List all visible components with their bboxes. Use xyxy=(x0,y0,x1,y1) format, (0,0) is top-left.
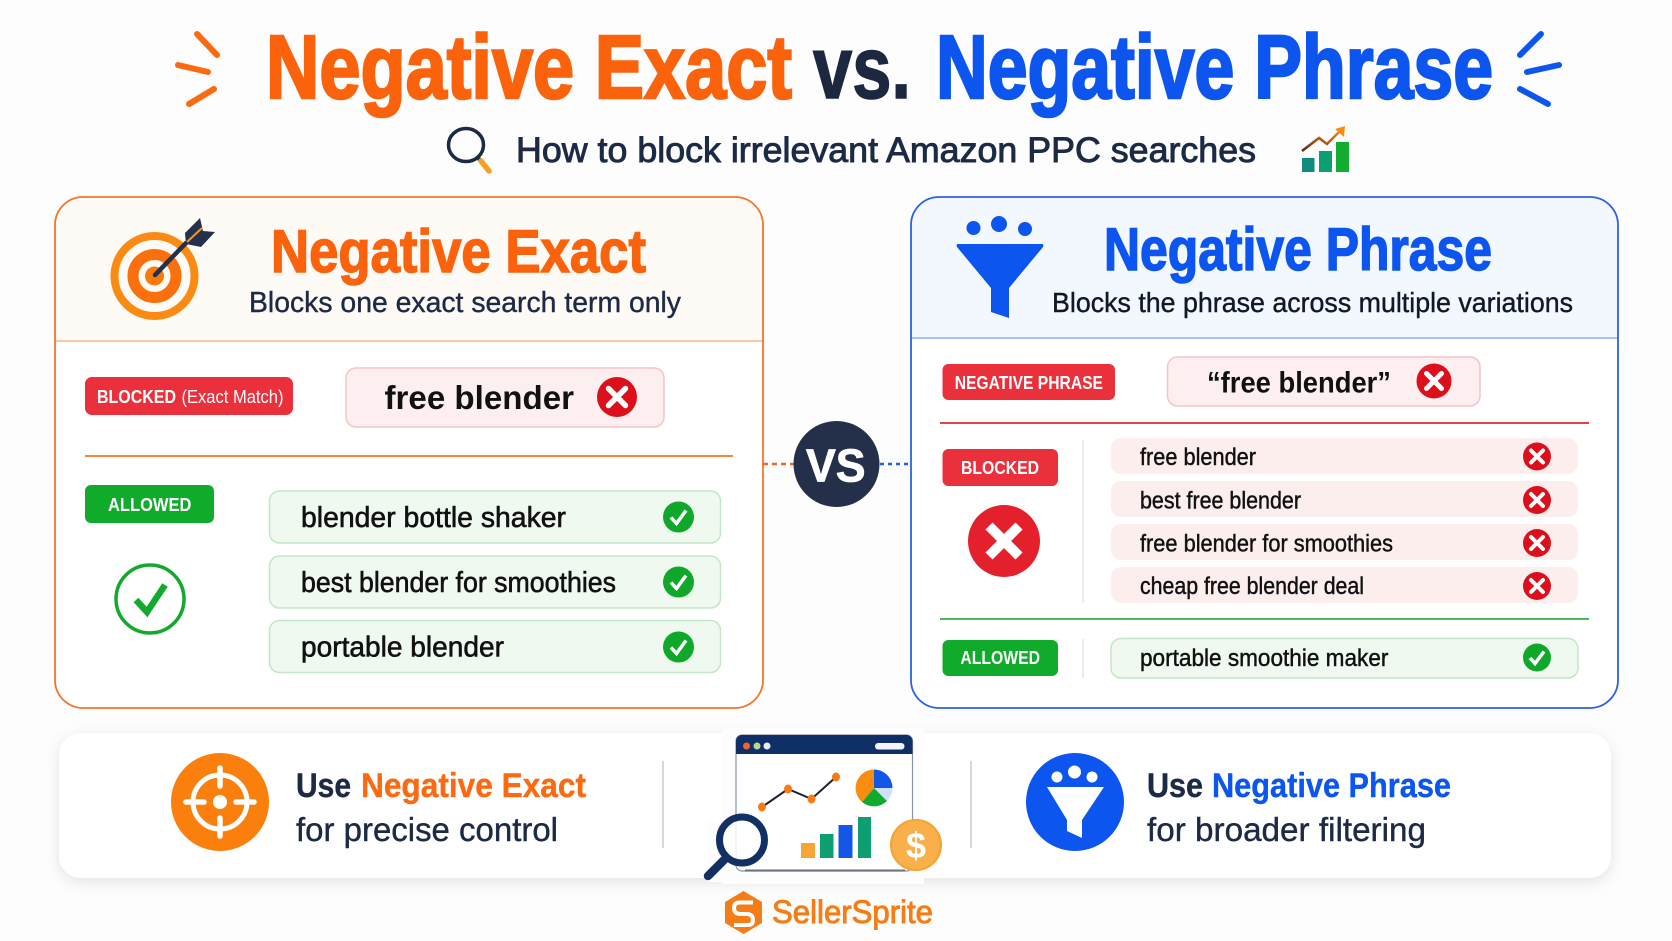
takeaway: negative exact xyxy=(296,767,586,848)
takeaway: negative phrase xyxy=(1147,767,1451,848)
badge: allowed xyxy=(85,485,214,523)
badge: allowed xyxy=(942,640,1058,676)
icon: magnifier xyxy=(448,128,489,171)
vs badge: VS xyxy=(806,440,866,492)
blocked row 2 xyxy=(1111,481,1578,517)
icon: funnel badge xyxy=(1026,753,1124,851)
title: vs.: vs. xyxy=(813,18,911,117)
badge: negative phrase: NEGATIVE PHRASE xyxy=(955,373,1103,393)
badge: blocked exact match: BLOCKED xyxy=(97,387,176,407)
bottom takeaway band xyxy=(59,728,1611,884)
blocked term xyxy=(346,368,664,427)
blocked row 3 xyxy=(1111,524,1578,560)
allowed row xyxy=(1111,638,1578,678)
icon: target with dart xyxy=(114,218,215,316)
dashboard illustration: $ xyxy=(906,825,926,866)
subtitle text: How to block irrelevant Amazon PPC searches xyxy=(516,131,1256,170)
blocked row 2: best free blender xyxy=(1140,488,1301,514)
blocked row 1: free blender xyxy=(1140,444,1256,471)
takeaway: negative exact: Use xyxy=(296,767,351,805)
blocked phrase: “free blender” xyxy=(1207,366,1391,400)
allowed row 1: blender bottle shaker xyxy=(301,502,566,534)
badge: blocked: BLOCKED xyxy=(961,458,1039,478)
badge: blocked exact match xyxy=(85,377,293,415)
icon: big red x xyxy=(968,505,1040,577)
panel subheading: Blocks one exact search term only xyxy=(249,287,681,319)
allowed row 3: portable blender xyxy=(301,632,504,664)
blocked row 4 xyxy=(1111,567,1578,603)
icon: growth chart xyxy=(1302,126,1349,172)
panel header background xyxy=(911,197,1618,338)
badge: allowed: ALLOWED xyxy=(108,495,191,515)
badge: allowed: ALLOWED xyxy=(960,648,1040,668)
vs connector xyxy=(763,421,911,507)
takeaway: negative exact: Negative Exact xyxy=(361,767,586,805)
panel heading: Negative Exact xyxy=(271,218,646,285)
panel subheading: Blocks the phrase across multiple variations xyxy=(1052,287,1573,318)
panel header background xyxy=(55,197,763,341)
dashboard illustration xyxy=(707,728,941,884)
allowed row 1 xyxy=(270,491,720,543)
vs badge xyxy=(794,421,880,507)
badge: negative phrase xyxy=(942,364,1115,400)
blocked row 4: cheap free blender deal xyxy=(1140,573,1364,600)
logo mark xyxy=(725,891,762,934)
takeaway: negative phrase: Use xyxy=(1147,767,1203,805)
blocked term: free blender xyxy=(384,379,574,416)
panel background xyxy=(911,197,1618,708)
panel: negative phrase xyxy=(911,197,1618,708)
left sparks xyxy=(178,34,217,104)
logo: SellerSprite xyxy=(725,891,933,934)
logo wordmark: SellerSprite xyxy=(772,894,933,930)
icon: big green check xyxy=(116,565,184,633)
icon: funnel xyxy=(957,216,1043,318)
allowed row 2 xyxy=(270,556,720,608)
takeaway: negative exact: for precise control xyxy=(296,811,558,848)
blocked list xyxy=(1111,438,1578,603)
panel: negative exact xyxy=(55,197,763,708)
right sparks xyxy=(1520,34,1559,104)
panel background xyxy=(55,197,763,708)
badge: blocked exact match: (Exact Match) xyxy=(182,387,284,407)
title: negative phrase: Negative Phrase xyxy=(936,18,1493,118)
subtitle xyxy=(448,126,1349,172)
allowed row 3 xyxy=(270,620,720,672)
allowed row 2: best blender for smoothies xyxy=(301,567,616,599)
allowed row: portable smoothie maker xyxy=(1140,645,1388,672)
blocked row 3: free blender for smoothies xyxy=(1140,530,1393,558)
blocked row 1 xyxy=(1111,438,1578,474)
takeaway: negative phrase: Negative Phrase xyxy=(1212,767,1451,805)
badge: blocked xyxy=(942,449,1058,486)
takeaway: negative phrase: for broader filtering xyxy=(1147,811,1426,848)
title xyxy=(178,18,1559,118)
blocked phrase xyxy=(1168,357,1480,406)
allowed list xyxy=(270,491,720,672)
band background xyxy=(59,733,1611,878)
title: negative exact: Negative Exact xyxy=(266,18,792,118)
icon: crosshair xyxy=(171,753,269,851)
panel heading: Negative Phrase xyxy=(1104,216,1492,283)
